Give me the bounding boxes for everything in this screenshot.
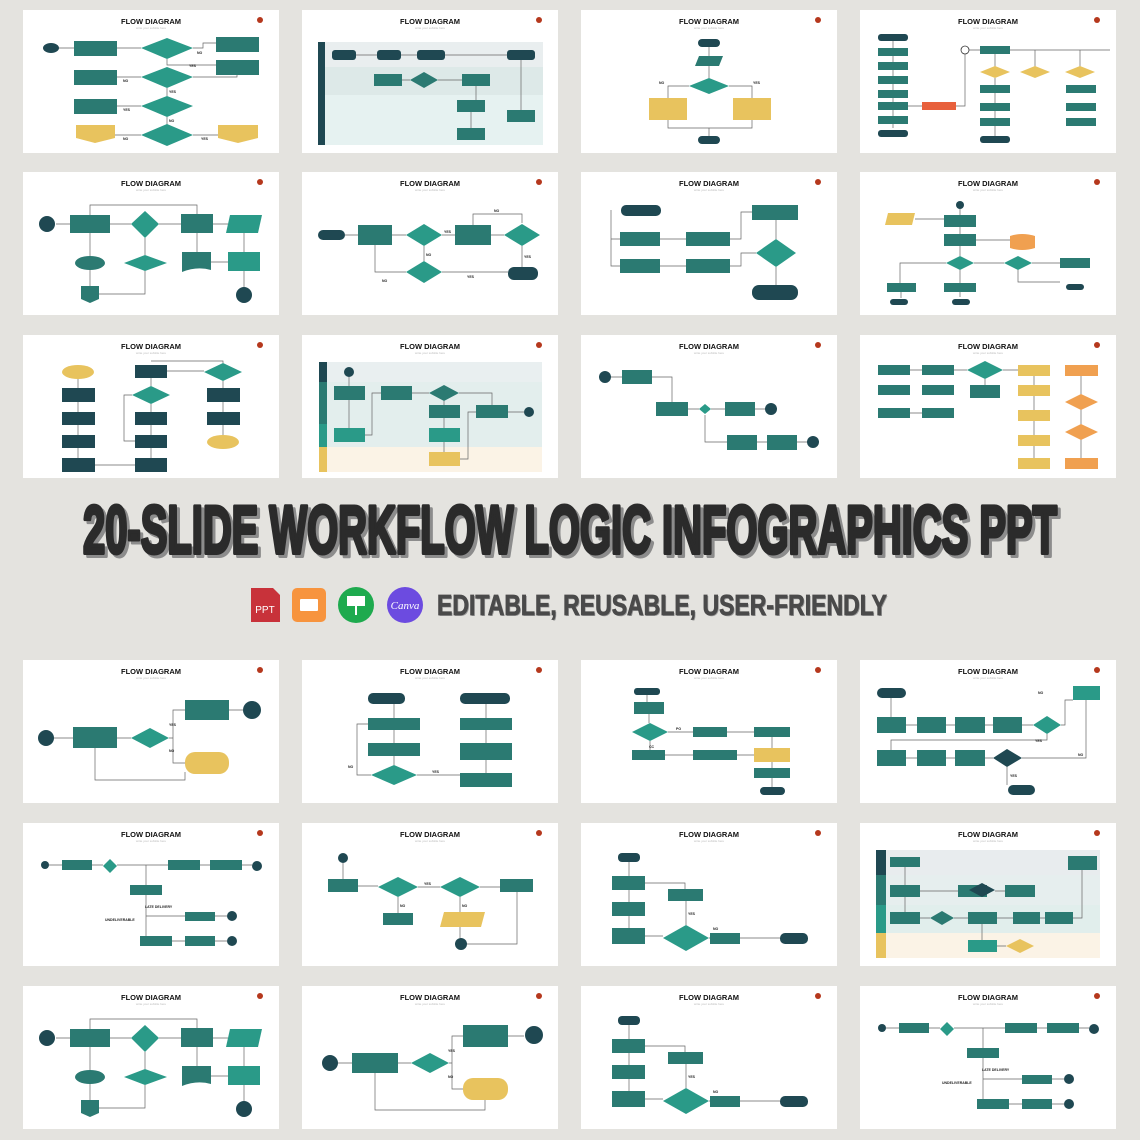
slide 14: two columns [302,660,558,803]
slide 19: vertical flow: FLOW DIAGRAM [679,830,739,839]
slide 12: colored columns: FLOW DIAGRAM [958,342,1018,351]
icon: slides [292,588,326,622]
slide 14: two columns: FLOW DIAGRAM [400,667,460,676]
slide 4: complex flow [860,10,1116,153]
slide 5: mixed shapes flow: write your subtitle here [136,188,166,192]
slide 1: flow diagram with decisions: NO [169,119,175,123]
slide 22: start process decision repeat: FLOW DIAGRAM [400,993,460,1002]
slide 24: article flow repeat: LATE DELIVERY [982,1068,1010,1072]
slide 21: mixed shapes flow repeat: FLOW DIAGRAM [121,993,181,1002]
slide 18: two decisions: write your subtitle here [415,839,445,843]
slide 10: swimlane with lanes [302,335,558,478]
slide 1: flow diagram with decisions: YES [123,108,131,112]
slide 11: approval flow: FLOW DIAGRAM [679,342,739,351]
slide 9: columns of navy boxes: write your subtitle here [136,351,166,355]
slide 7: grid flow: write your subtitle here [694,188,724,192]
slide 22: start process decision repeat: write your subtitle here [415,1002,445,1006]
slide 6: loop flow: NO [382,279,388,283]
slide 13: start process decision: FLOW DIAGRAM [121,667,181,676]
slide 2: swimlane: write your subtitle here [415,26,445,30]
slide 18: two decisions: NO [400,904,406,908]
slide 24: article flow repeat: FLOW DIAGRAM [958,993,1018,1002]
slide 12: colored columns: write your subtitle here [973,351,1003,355]
slide 1: flow diagram with decisions: NO [123,137,129,141]
slide 5: mixed shapes flow [23,172,279,315]
slide 20: swimlane 2: FLOW DIAGRAM [958,830,1018,839]
slide 9: columns of navy boxes [23,335,279,478]
slide 6: loop flow: NO [494,209,500,213]
slide 15: PO flow: CC [649,745,655,749]
slide 15: PO flow: FLOW DIAGRAM [679,667,739,676]
slide 8: branching with database [860,172,1116,315]
slide 7: grid flow: FLOW DIAGRAM [679,179,739,188]
slide 6: loop flow: write your subtitle here [415,188,445,192]
slide 15: PO flow: write your subtitle here [694,676,724,680]
slide 17: article flow: write your subtitle here [136,839,166,843]
slide 11: approval flow: write your subtitle here [694,351,724,355]
slide 21: mixed shapes flow repeat: write your subtitle here [136,1002,166,1006]
slide 14: two columns: YES [432,770,440,774]
slide 1: flow diagram with decisions: YES [201,137,209,141]
slide 16: rows of steps: NO [1078,753,1084,757]
slide 6: loop flow: YES [467,275,475,279]
slide 16: rows of steps: FLOW DIAGRAM [958,667,1018,676]
slide 1: flow diagram with decisions [23,10,279,153]
slide 11: approval flow [581,335,837,478]
slide 19: vertical flow: NO [713,927,719,931]
slide 23: vertical flow repeat: YES [688,1075,696,1079]
slide 15: PO flow: PO [676,727,681,731]
icon: keynote [338,587,374,623]
slide 1: flow diagram with decisions: YES [169,90,177,94]
slide 16: rows of steps: NO [1038,691,1044,695]
slide 17: article flow [23,823,279,966]
slide 6: loop flow: YES [444,230,452,234]
slide 7: grid flow [581,172,837,315]
slide 10: swimlane with lanes: FLOW DIAGRAM [400,342,460,351]
slide 16: rows of steps: YES [1010,774,1018,778]
slide 24: article flow repeat: write your subtitle here [973,1002,1003,1006]
slide 1: flow diagram with decisions: YES [189,64,197,68]
slide 13: start process decision: write your subtitle here [136,676,166,680]
slide 21: mixed shapes flow repeat [23,986,279,1129]
slide 24: article flow repeat [860,986,1116,1129]
icon: ppt: PPT [255,605,275,616]
slide 18: two decisions: NO [462,904,468,908]
slide 23: vertical flow repeat [581,986,837,1129]
slide 18: two decisions: FLOW DIAGRAM [400,830,460,839]
slide 19: vertical flow: YES [688,912,696,916]
slide 6: loop flow: FLOW DIAGRAM [400,179,460,188]
slide 23: vertical flow repeat: write your subtitle here [694,1002,724,1006]
slide 3: simple branching: write your subtitle here [694,26,724,30]
slide 18: two decisions: YES [424,882,432,886]
slide 13: start process decision [23,660,279,803]
slide 12: colored columns [860,335,1116,478]
slide 6: loop flow: NO [426,253,432,257]
slide 1: flow diagram with decisions: FLOW DIAGRAM [121,17,181,26]
slide 16: rows of steps [860,660,1116,803]
slide 17: article flow: LATE DELIVERY [145,905,173,909]
slide 4: complex flow: write your subtitle here [973,26,1003,30]
slide 23: vertical flow repeat: NO [713,1090,719,1094]
slide 19: vertical flow: write your subtitle here [694,839,724,843]
slide 23: vertical flow repeat: FLOW DIAGRAM [679,993,739,1002]
slide 22: start process decision repeat: YES [448,1049,456,1053]
app icons and tagline [251,587,888,623]
icon: canva: Canva [391,600,420,612]
icon: canva [387,587,423,623]
slide 16: rows of steps: YES [1035,739,1043,743]
slide 9: columns of navy boxes: FLOW DIAGRAM [121,342,181,351]
slide 1: flow diagram with decisions: NO [123,79,129,83]
slide 5: mixed shapes flow: FLOW DIAGRAM [121,179,181,188]
slide 17: article flow: FLOW DIAGRAM [121,830,181,839]
slide 18: two decisions [302,823,558,966]
slide 10: swimlane with lanes: write your subtitle here [415,351,445,355]
slide 20: swimlane 2: write your subtitle here [973,839,1003,843]
slide 4: complex flow: FLOW DIAGRAM [958,17,1018,26]
slide 22: start process decision repeat [302,986,558,1129]
slide 24: article flow repeat: UNDELIVERABLE [942,1081,972,1085]
slide 19: vertical flow [581,823,837,966]
slide 3: simple branching: FLOW DIAGRAM [679,17,739,26]
slide 14: two columns: NO [348,765,354,769]
slide 2: swimlane [302,10,558,153]
slide 17: article flow: UNDELIVERABLE [105,918,135,922]
slide 22: start process decision repeat: NO [448,1075,454,1079]
slide 3: simple branching: YES [753,81,761,85]
slide 13: start process decision: YES [169,723,177,727]
slide 6: loop flow: YES [524,255,532,259]
slide 6: loop flow [302,172,558,315]
slide 1: flow diagram with decisions: write your subtitle here [136,26,166,30]
slide 3: simple branching: NO [659,81,665,85]
slide 8: branching with database: FLOW DIAGRAM [958,179,1018,188]
slide 3: simple branching [581,10,837,153]
slide 14: two columns: write your subtitle here [415,676,445,680]
slide 1: flow diagram with decisions: NO [197,51,203,55]
slide 2: swimlane: FLOW DIAGRAM [400,17,460,26]
slide 13: start process decision: NO [169,749,175,753]
slide 20: swimlane 2 [860,823,1116,966]
icon: ppt [251,588,280,622]
slide 8: branching with database: write your subtitle here [973,188,1003,192]
slide 15: PO flow [581,660,837,803]
slide 16: rows of steps: write your subtitle here [973,676,1003,680]
